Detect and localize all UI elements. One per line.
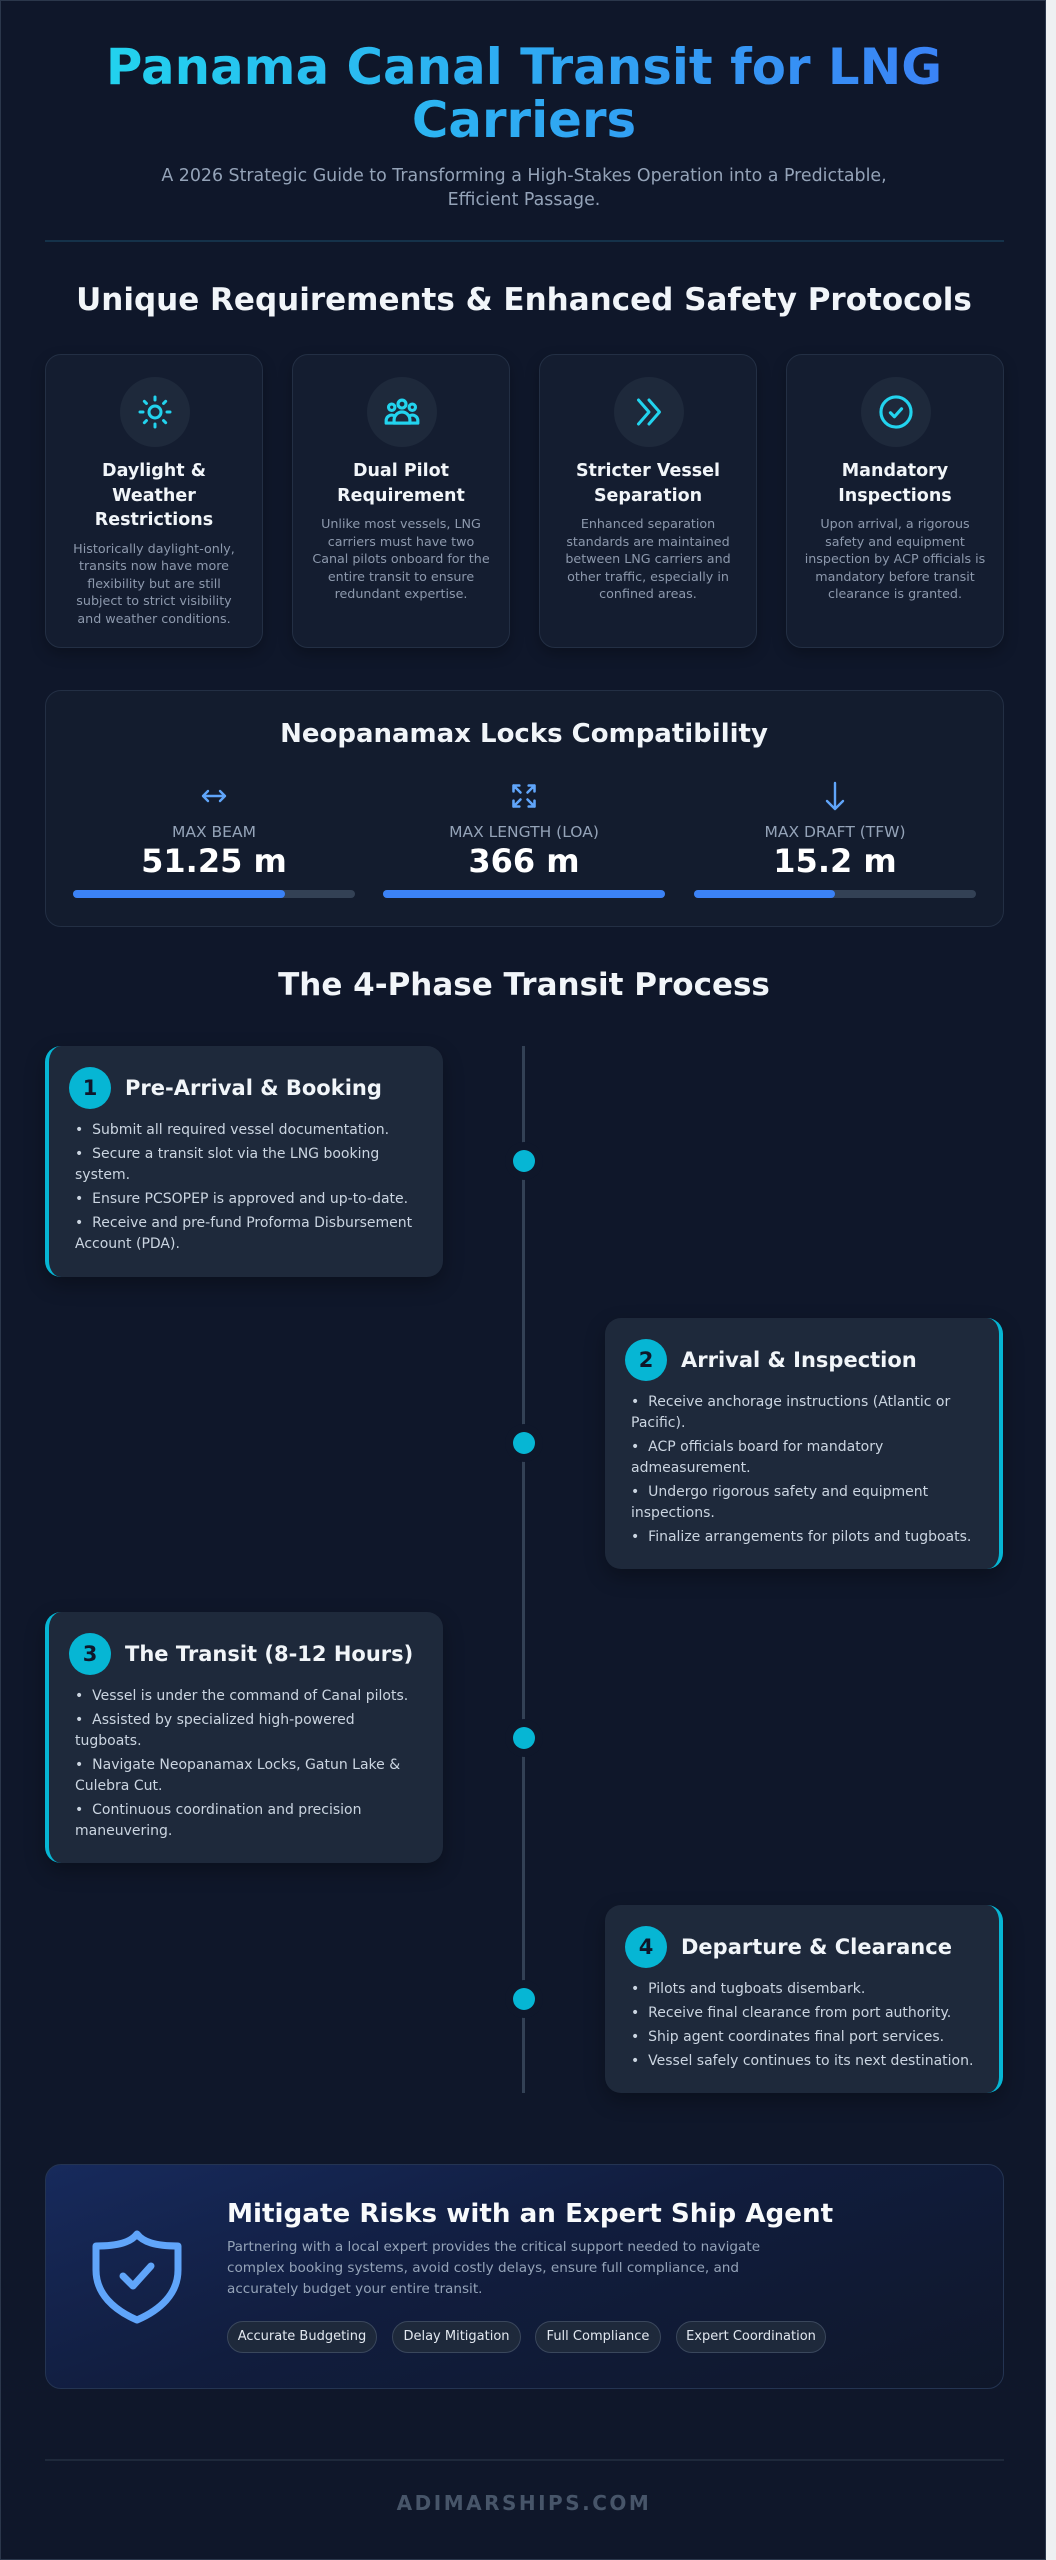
step 3: • Assisted by specialized high-powered	[75, 1712, 355, 1728]
footer brand: ADIMARSHIPS.COM	[397, 2491, 651, 2515]
step 1: Pre-Arrival & Booking	[125, 1076, 382, 1100]
card: inspections: mandatory before transit	[815, 568, 975, 584]
step 4	[605, 1905, 1003, 2093]
step 2: 2	[639, 1348, 653, 1372]
card: inspections: inspection by ACP officials is	[805, 551, 985, 566]
stat: beam: 51.25 m	[141, 842, 287, 880]
step 3: • Vessel is under the command of Canal pilots.	[75, 1688, 408, 1704]
dot 4	[513, 1988, 535, 2010]
cta text: complex booking systems, avoid costly delays, ensure full compliance, and	[227, 2260, 739, 2276]
card: dual pilot: carriers must have two	[328, 534, 474, 548]
card: daylight: transits now have more	[79, 558, 229, 573]
subtitle: Efficient Passage.	[448, 190, 600, 210]
title	[106, 38, 942, 149]
subtitle	[161, 166, 887, 210]
step 2: • Undergo rigorous safety and equipment	[631, 1484, 928, 1500]
panel: cta	[45, 2164, 1004, 2389]
card: inspections: Mandatory	[842, 461, 948, 481]
step 4: • Pilots and tugboats disembark.	[631, 1980, 865, 1996]
dot 2	[513, 1432, 535, 1454]
dot 1	[513, 1150, 535, 1172]
step 2: Pacific).	[631, 1414, 685, 1430]
step 2: • Finalize arrangements for pilots and tugboats.	[631, 1529, 971, 1545]
card: daylight: and weather conditions.	[77, 610, 231, 626]
step 4: • Receive final clearance from port authority.	[631, 2005, 951, 2021]
chip: budgeting	[227, 2321, 377, 2353]
card: separation: standards are maintained	[566, 534, 730, 548]
card: dual pilot: Unlike most vessels, LNG	[321, 516, 481, 531]
icon: shield	[92, 2230, 182, 2324]
icon: chevrons	[614, 377, 684, 447]
chip: compliance: Full Compliance	[547, 2329, 649, 2344]
icon: sun	[120, 377, 190, 447]
card: separation: Separation	[594, 486, 702, 506]
step 4: 4	[639, 1935, 653, 1959]
step 1: 1	[83, 1076, 97, 1100]
step 2	[605, 1318, 1003, 1569]
step 1: • Ensure PCSOPEP is approved and up-to-date.	[75, 1191, 408, 1207]
step 1: • Receive and pre-fund Proforma Disbursement	[75, 1215, 412, 1231]
icon: check circle	[861, 377, 931, 447]
card: inspections: clearance is granted.	[828, 586, 962, 601]
card: separation: Enhanced separation	[581, 516, 715, 531]
chip: delay: Delay Mitigation	[403, 2329, 510, 2344]
card: dual pilot: entire transit to ensure	[328, 568, 474, 584]
stat: length	[449, 784, 599, 880]
step 3	[45, 1612, 443, 1863]
card: daylight: flexibility but are still	[87, 576, 221, 590]
stat: draft: MAX DRAFT (TFW)	[764, 823, 906, 841]
step 3: • Navigate Neopanamax Locks, Gatun Lake &	[75, 1757, 400, 1773]
title: Panama Canal Transit for LNG	[106, 38, 942, 96]
timeline line	[522, 1046, 525, 2093]
chip: compliance	[535, 2321, 661, 2353]
bar: draft	[694, 890, 976, 898]
card: dual pilot: Requirement	[337, 486, 465, 506]
card: separation: confined areas.	[599, 586, 697, 601]
card: inspections	[786, 354, 1004, 648]
card: dual pilot: Dual Pilot	[353, 461, 449, 481]
cta text	[227, 2239, 760, 2297]
card: separation	[539, 354, 757, 648]
step 2: inspections.	[631, 1505, 715, 1521]
card: inspections: safety and equipment	[825, 534, 965, 548]
stat: beam	[141, 790, 287, 880]
cta text: Partnering with a local expert provides the critical support needed to navigate	[227, 2239, 760, 2255]
card: daylight: Historically daylight-only,	[73, 540, 235, 556]
cta text: accurately budget your entire transit.	[227, 2281, 482, 2297]
card: daylight	[45, 354, 263, 648]
chip: budgeting: Accurate Budgeting	[238, 2329, 366, 2344]
chip: delay	[392, 2321, 521, 2353]
step 2: admeasurement.	[631, 1460, 751, 1476]
card: daylight: subject to strict visibility	[76, 593, 232, 608]
card: dual pilot: Canal pilots onboard for the	[312, 551, 490, 566]
card: inspections: Upon arrival, a rigorous	[820, 516, 970, 531]
icon: users	[367, 377, 437, 447]
chip: coordination: Expert Coordination	[686, 2329, 816, 2344]
step 3: The Transit (8-12 Hours)	[125, 1642, 413, 1666]
stat: beam: MAX BEAM	[172, 823, 256, 841]
step 4: Departure & Clearance	[681, 1935, 952, 1959]
stat: length: MAX LENGTH (LOA)	[449, 823, 599, 841]
card: separation: Stricter Vessel	[576, 461, 720, 481]
card: daylight: Weather	[112, 486, 196, 506]
subtitle: A 2026 Strategic Guide to Transforming a High-Stakes Operation into a Predictable,	[161, 166, 887, 186]
card: dual pilot: redundant expertise.	[335, 586, 467, 601]
step 1: • Submit all required vessel documentation.	[75, 1122, 389, 1138]
chip: coordination	[676, 2321, 826, 2353]
cta title: Mitigate Risks with an Expert Ship Agent	[227, 2199, 833, 2229]
step 4: • Vessel safely continues to its next destination.	[631, 2053, 973, 2069]
dot 3	[513, 1727, 535, 1749]
step 1: Account (PDA).	[75, 1236, 180, 1252]
step 2: • ACP officials board for mandatory	[631, 1439, 883, 1455]
step 2: Arrival & Inspection	[681, 1348, 917, 1372]
step 1: • Secure a transit slot via the LNG booking	[75, 1146, 379, 1162]
stat: length: 366 m	[468, 842, 580, 880]
step 4: • Ship agent coordinates final port services.	[631, 2029, 944, 2045]
step 3: 3	[83, 1642, 97, 1666]
step 3: tugboats.	[75, 1733, 142, 1749]
step 3: maneuvering.	[75, 1823, 172, 1839]
stat: draft: 15.2 m	[773, 842, 897, 880]
step 1: system.	[75, 1167, 130, 1183]
card: inspections: Inspections	[838, 486, 952, 506]
step 1	[45, 1046, 443, 1277]
stat: draft	[764, 782, 906, 880]
card: separation: between LNG carriers and	[565, 551, 731, 566]
heading: process: The 4-Phase Transit Process	[278, 967, 770, 1003]
step 2: • Receive anchorage instructions (Atlantic or	[631, 1394, 950, 1410]
step 3: Culebra Cut.	[75, 1778, 162, 1794]
bar: length	[383, 890, 665, 898]
step 3: • Continuous coordination and precision	[75, 1802, 361, 1818]
card: separation: other traffic, especially in	[567, 568, 729, 584]
card: daylight: Restrictions	[95, 510, 213, 530]
card: dual pilot	[292, 354, 510, 648]
title: Carriers	[412, 91, 636, 149]
panel: locks	[45, 690, 1004, 927]
locks title: Neopanamax Locks Compatibility	[280, 719, 768, 749]
heading: requirements: Unique Requirements & Enhanced Safety Protocols	[76, 282, 972, 318]
bar: beam	[73, 890, 355, 898]
card: daylight: Daylight &	[102, 461, 206, 481]
